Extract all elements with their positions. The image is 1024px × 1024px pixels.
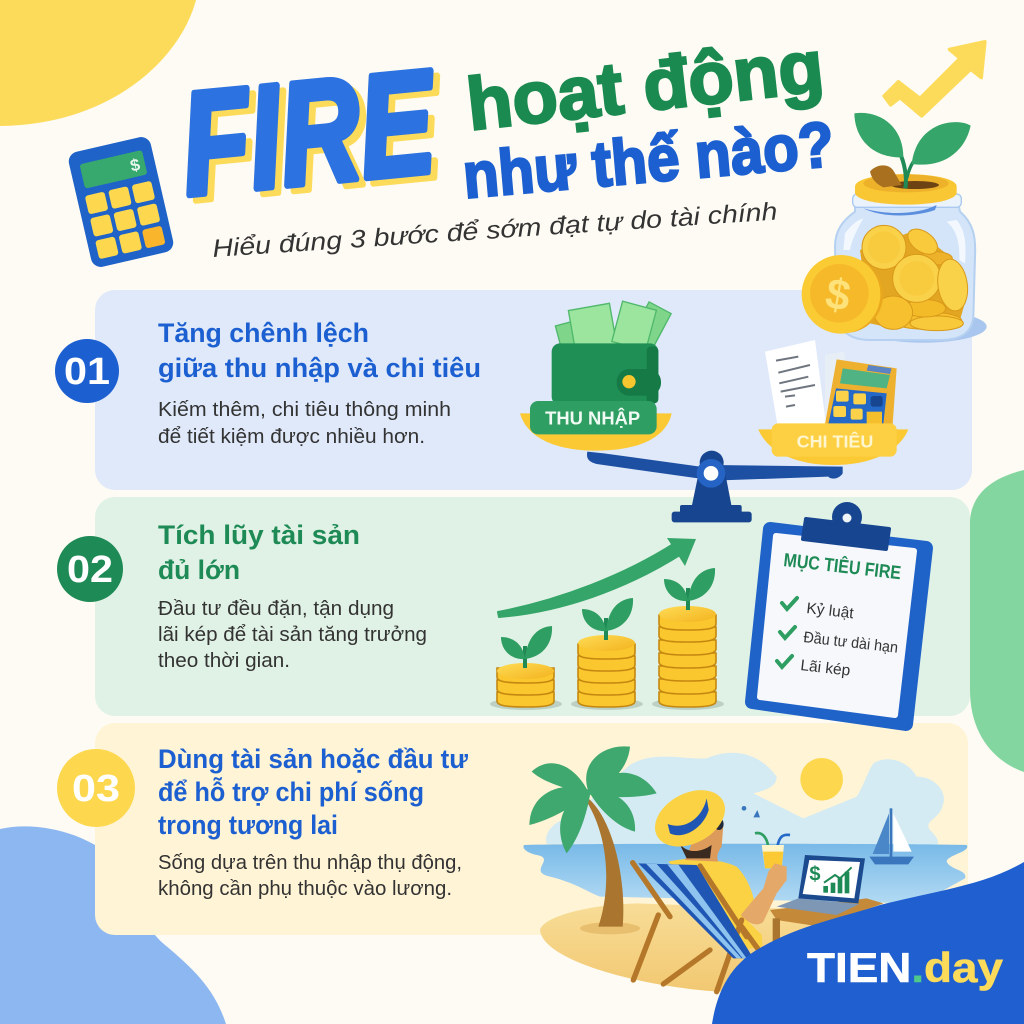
- step 1 text: để tiết kiệm được nhiều hơn.: [158, 426, 425, 448]
- panel: step 2 background: [95, 497, 970, 716]
- decorative blob: dark blue bottom right: [712, 862, 1024, 1024]
- step 3 number badge: [57, 749, 135, 827]
- coin stack 3: [652, 568, 724, 710]
- scale beam: [587, 452, 843, 481]
- coin stack 1: [490, 626, 562, 710]
- coin stack 2: [571, 598, 643, 710]
- icon: calculator: $: [128, 155, 142, 176]
- yellow growth arrow: [884, 42, 985, 116]
- jar neck ring: [853, 194, 961, 207]
- step 3 text: Dùng tài sản hoặc đầu tư: [158, 744, 468, 774]
- sailboat: [869, 808, 914, 864]
- decorative blob: yellow top left: [0, 0, 196, 126]
- step 2 text: theo thời gian.: [158, 650, 290, 672]
- title: FIRE: FIRE: [174, 39, 444, 226]
- illustration: balance scale with wallet and calculator: [520, 301, 908, 522]
- step 3 text: để hỗ trợ chi phí sống: [158, 776, 424, 807]
- palm tree: [529, 746, 657, 934]
- label: thu nhập: [530, 401, 657, 434]
- label: chi tiêu: [772, 423, 897, 457]
- jar shadow: [860, 311, 987, 343]
- arm: [741, 863, 787, 924]
- step 1 number badge: 01: [64, 351, 110, 393]
- big dollar coin: [802, 255, 883, 334]
- decorative blob: green right: [970, 470, 1024, 772]
- step 2 text: Tích lũy tài sản: [158, 520, 360, 550]
- step 3 text: [158, 744, 468, 900]
- sun: [800, 758, 843, 801]
- step 3 text: Sống dựa trên thu nhập thụ động,: [158, 852, 462, 874]
- deck chair: [633, 863, 760, 992]
- scale pivot: [697, 459, 725, 488]
- check item: lãi kép: [777, 656, 851, 680]
- jar body: [835, 203, 975, 340]
- small calculator: [825, 359, 897, 424]
- scale stand: [672, 451, 752, 522]
- step 3 text: không cần phụ thuộc vào lương.: [158, 878, 452, 900]
- step 1 number badge: [55, 339, 119, 403]
- person: [645, 779, 763, 950]
- icon: calculator: [67, 135, 175, 269]
- receipt: [765, 340, 847, 424]
- step 2 text: [158, 520, 427, 672]
- money bills: [555, 301, 671, 352]
- check item: đầu tư dài hạn: [780, 627, 899, 657]
- clipboard clip: [803, 502, 889, 549]
- check item: kỷ luật: Kỷ luật: [806, 600, 855, 622]
- big dollar coin: $: [822, 270, 854, 321]
- sea: [523, 844, 967, 903]
- step 2 number badge: 02: [67, 549, 113, 591]
- cocktail: [755, 833, 790, 868]
- right plate: [758, 429, 908, 465]
- check item: kỷ luật: [782, 598, 855, 622]
- sand: [540, 903, 853, 992]
- check item: lãi kép: Lãi kép: [800, 657, 851, 680]
- table: [770, 898, 883, 942]
- step 2 text: Đầu tư đều đặn, tận dụng: [158, 598, 394, 620]
- clipboard: mục tiêu FIRE: [752, 502, 926, 724]
- decorative blob: light blue bottom left: [0, 826, 226, 1024]
- title: hoạt động: hoạt động: [463, 24, 828, 146]
- check item: đầu tư dài hạn: Đầu tư dài hạn: [803, 629, 899, 657]
- panel: step 1 background: [95, 290, 972, 490]
- jar lid: [855, 165, 957, 205]
- step 3 text: trong tương lai: [158, 810, 338, 840]
- panel: step 3 background: [95, 723, 968, 935]
- heading: MỤC TIÊU FIRE: [782, 549, 902, 584]
- illustration: coin stacks with sprouts: [490, 538, 724, 710]
- illustration: money jar: [802, 42, 987, 343]
- jar neck band: [863, 205, 937, 215]
- label: chi tiêu: CHI TIÊU: [797, 430, 873, 451]
- step 3 number badge: 03: [72, 768, 120, 810]
- step 2 text: đủ lớn: [158, 555, 240, 585]
- left plate: [520, 413, 672, 451]
- jar highlights: [843, 218, 966, 263]
- step 1 text: [158, 318, 481, 448]
- title: FIRE: FIRE: [181, 45, 451, 231]
- step 2 text: lãi kép để tài sản tăng trưởng: [158, 624, 427, 646]
- step 1 text: Tăng chênh lệch: [158, 318, 369, 348]
- laptop: $: [809, 864, 821, 886]
- step 1 text: giữa thu nhập và chi tiêu: [158, 353, 481, 383]
- step 1 text: Kiếm thêm, chi tiêu thông minh: [158, 399, 451, 421]
- coins in jar: [860, 224, 971, 331]
- subtitle: Hiểu đúng 3 bước để sớm đạt tự do tài chính: [212, 198, 778, 263]
- step 2 number badge: [57, 536, 123, 602]
- clouds: [546, 753, 944, 845]
- birds: [742, 806, 760, 817]
- label: thu nhập: THU NHẬP: [545, 407, 640, 428]
- growth arrow: [498, 538, 696, 617]
- wallet: [552, 343, 661, 405]
- brand logo: TIEN.day: TIEN.day: [807, 944, 1004, 991]
- laptop: [777, 855, 865, 915]
- title: như thế nào?: như thế nào?: [460, 108, 837, 212]
- illustration: beach scene: [523, 746, 967, 992]
- leaves: [854, 113, 971, 188]
